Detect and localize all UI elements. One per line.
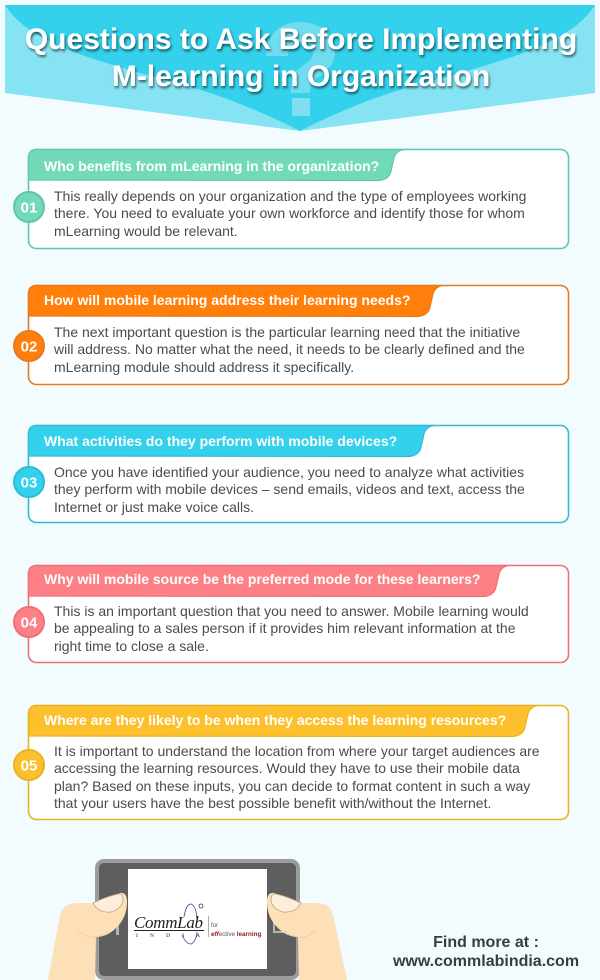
- header tab 05: [28, 706, 538, 736]
- title text: [25, 23, 577, 93]
- right thumbnail: [271, 894, 301, 912]
- logo: I N D I A: [136, 933, 200, 939]
- number badge 04: 04: [21, 614, 38, 632]
- header tab 04: [28, 566, 509, 596]
- panel: question 01: [14, 150, 568, 248]
- right hand: [267, 893, 347, 980]
- number badge 05: [14, 750, 44, 780]
- body text 04: [54, 603, 529, 654]
- body text 02: The next important question is the particular learning need that the initiative: [54, 324, 520, 340]
- heading 01: Who benefits from mLearning in the organization?: [44, 158, 379, 174]
- body text 04: right time to close a sale.: [54, 638, 209, 654]
- left hand: [48, 893, 127, 980]
- panel: question 02: [14, 286, 568, 384]
- header tab 01: [28, 150, 404, 180]
- body text 01: This really depends on your organization and the type of employees working: [54, 188, 526, 204]
- number badge 01: 01: [21, 200, 37, 216]
- logo: CommLab: [134, 913, 203, 932]
- body text 01: there. You need to evaluate your own workforce and identify those for whom: [54, 205, 525, 221]
- header tab 02: [28, 286, 443, 316]
- illustration: hands holding tablet: [48, 861, 347, 980]
- logo: for: [211, 923, 218, 929]
- icon: question mark watermark: [266, 22, 335, 116]
- footer: find more: Find more at :: [433, 934, 539, 951]
- body text 05: accessing the learning resources. Would they have to use their mobile data: [54, 760, 520, 776]
- number badge 02: [14, 331, 44, 361]
- footer: find more: [392, 934, 579, 970]
- logo: [134, 904, 261, 944]
- header tab 03: [28, 426, 434, 456]
- number badge 01: [14, 192, 44, 222]
- title text: M-learning in Organization: [112, 60, 490, 93]
- body text 03: they perform with mobile devices – send emails, videos and text, access the: [54, 481, 525, 497]
- body text 03: Internet or just make voice calls.: [54, 499, 254, 515]
- body text 05: It is important to understand the location from where your target audiences are: [54, 743, 540, 759]
- body text 02: mLearning module should address it specifically.: [54, 359, 354, 375]
- body text 02: will address. No matter what the need, it needs to be clearly defined and the: [53, 341, 525, 357]
- logo: effective learning: [211, 931, 261, 938]
- panel: question 04: [14, 566, 568, 662]
- number badge 03: 03: [21, 474, 37, 492]
- heading 03: What activities do they perform with mobile devices?: [44, 433, 397, 449]
- body text 05: that your users have the best possible benefit with/without the Internet.: [54, 795, 491, 811]
- left thumbnail: [93, 894, 123, 912]
- panel: question 03: [14, 426, 568, 522]
- heading 05: Where are they likely to be when they access the learning resources?: [44, 712, 506, 728]
- number badge 05: 05: [21, 758, 37, 774]
- left finger crease: [78, 930, 110, 937]
- footer: find more: www.commlabindia.com: [392, 953, 579, 970]
- number badge 02: 02: [21, 338, 37, 356]
- heading 04: Why will mobile source be the preferred mode for these learners?: [44, 571, 480, 587]
- right finger crease: [284, 930, 316, 937]
- body text 04: This is an important question that you need to answer. Mobile learning would: [54, 603, 529, 619]
- panel: question 05: [14, 706, 568, 820]
- title banner: [5, 5, 595, 131]
- body text 01: mLearning would be relevant.: [54, 223, 238, 239]
- body text 05: [54, 743, 540, 811]
- number badge 03: [14, 467, 44, 497]
- number badge 04: [14, 607, 44, 637]
- body text 01: [54, 188, 526, 239]
- body text 03: [54, 464, 525, 515]
- logo screen: [128, 869, 267, 969]
- body text 05: plan? Based on these inputs, you can decide to format content in such a way: [54, 778, 530, 794]
- heading 02: How will mobile learning address their learning needs?: [44, 292, 410, 308]
- tablet: [97, 861, 298, 978]
- body text 03: Once you have identified your audience, you need to analyze what activities: [54, 464, 524, 480]
- title text: Questions to Ask Before Implementing: [25, 23, 577, 56]
- body text 02: [53, 324, 525, 375]
- body text 04: be appealing to a sales person if it provides him relevant information at the: [54, 620, 516, 636]
